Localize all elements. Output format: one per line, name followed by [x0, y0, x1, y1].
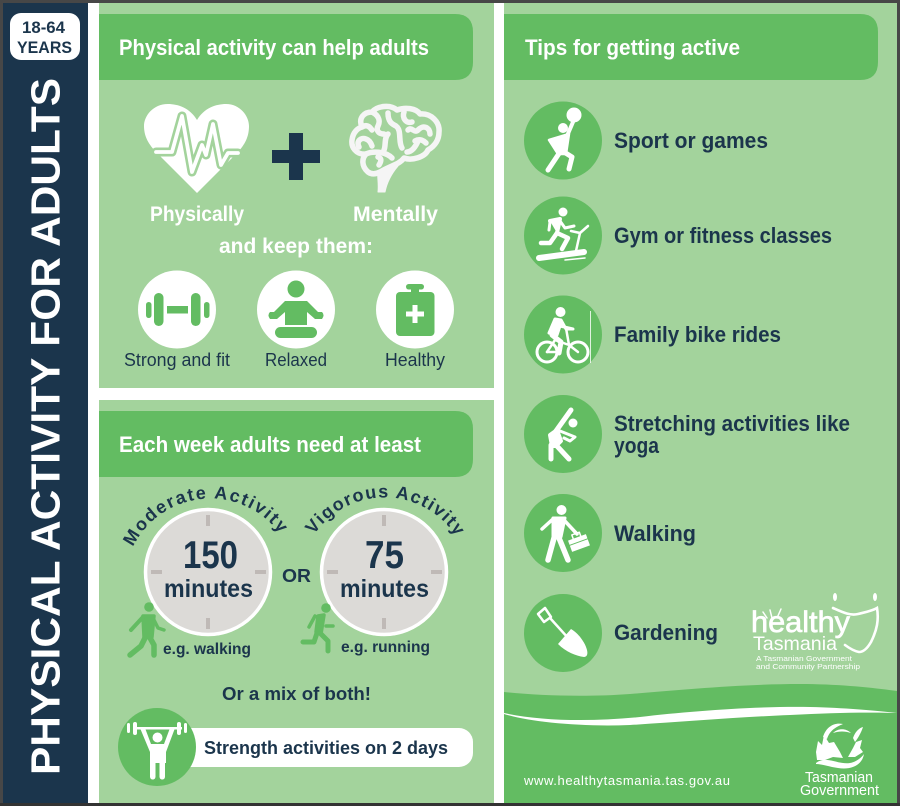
text: or a mix of both: Or a mix of both! [222, 684, 371, 704]
tip: walking [524, 494, 696, 572]
tip: gardening: Gardening [614, 620, 718, 645]
icon: running person [303, 603, 333, 651]
heading: tips for getting active [504, 14, 878, 80]
label: physically: Physically [150, 203, 244, 226]
clock: moderate activity 150 minutes: 150 [183, 534, 238, 577]
curved label: vigorous activity: Vigorous Activity [304, 486, 464, 534]
clock: vigorous activity 75 minutes: minutes [340, 575, 429, 603]
icon: brain [352, 106, 439, 192]
logo: healthy tasmania: and Community Partnership [756, 662, 860, 671]
strength activities banner [118, 708, 473, 786]
heading: physical activity can help adults [99, 14, 473, 80]
strength activities banner: Strength activities on 2 days [204, 738, 448, 758]
age badge: YEARS [17, 38, 72, 57]
panel: weekly activity needs [99, 400, 494, 803]
heading: physical activity can help adults: Physical activity can help adults [119, 35, 429, 60]
tip: stretching activities like yoga: yoga [614, 433, 660, 458]
curved label: moderate activity: Moderate Activity [122, 486, 287, 546]
logo: tasmanian government [800, 724, 879, 799]
tip: sport or games: Sport or games [614, 128, 768, 153]
icon: walking person [130, 602, 164, 655]
heading: tips for getting active: Tips for getting active [525, 35, 740, 60]
text: or: OR [282, 566, 311, 586]
tip: sport or games [524, 102, 768, 180]
heading: each week adults need at least: Each week adults need at least [119, 432, 422, 457]
label: strong and fit: Strong and fit [124, 350, 230, 370]
logo: healthy tasmania [751, 593, 878, 671]
tip: walking: Walking [614, 521, 696, 546]
tip: stretching activities like yoga: Stretching activities like [614, 411, 850, 436]
icon: plus [272, 133, 320, 180]
icon: heart with pulse [144, 104, 249, 193]
icon: meditating person in circle [257, 270, 335, 348]
tip: gym or fitness classes: Gym or fitness classes [614, 223, 832, 248]
tip: family bike rides [524, 296, 781, 374]
icon: dumbbell in circle [138, 270, 216, 348]
clock: moderate activity 150 minutes: minutes [164, 575, 253, 603]
panel: tips for getting active [504, 3, 897, 803]
label: healthy: Healthy [385, 350, 445, 370]
icon: medicine bottle in circle [376, 270, 454, 348]
tip: gym or fitness classes [524, 196, 832, 274]
green wave footer [504, 684, 897, 803]
logo: tasmanian government: Government [800, 783, 879, 799]
heading: each week adults need at least [99, 411, 473, 477]
tip: gardening [524, 594, 718, 672]
clock: moderate activity 150 minutes [146, 510, 270, 634]
sidebar [3, 3, 88, 803]
logo: healthy tasmania: healthy [751, 606, 850, 639]
logo: healthy tasmania: A Tasmanian Government [756, 654, 853, 663]
tip: stretching activities like yoga [524, 395, 850, 473]
clock: vigorous activity 75 minutes: 75 [365, 534, 404, 577]
panel: physical activity benefits [99, 3, 494, 388]
tip: family bike rides: Family bike rides [614, 322, 781, 347]
clock: vigorous activity 75 minutes [322, 510, 446, 634]
label: e.g. walking: e.g. walking [163, 641, 251, 658]
label: relaxed: Relaxed [265, 350, 327, 370]
logo: healthy tasmania: Tasmania [753, 633, 837, 655]
age badge: 18-64 [22, 18, 66, 37]
label: mentally: Mentally [353, 203, 438, 226]
text: and keep them: and keep them: [219, 235, 373, 258]
sidebar title: PHYSICAL ACTIVITY FOR ADULTS [22, 78, 68, 775]
icon: weightlifter [118, 708, 196, 786]
website url: www.healthytasmania.tas.gov.au [523, 773, 730, 788]
logo: tasmanian government: Tasmanian [805, 770, 873, 786]
age badge [10, 13, 80, 60]
label: e.g. running: e.g. running [341, 639, 430, 656]
